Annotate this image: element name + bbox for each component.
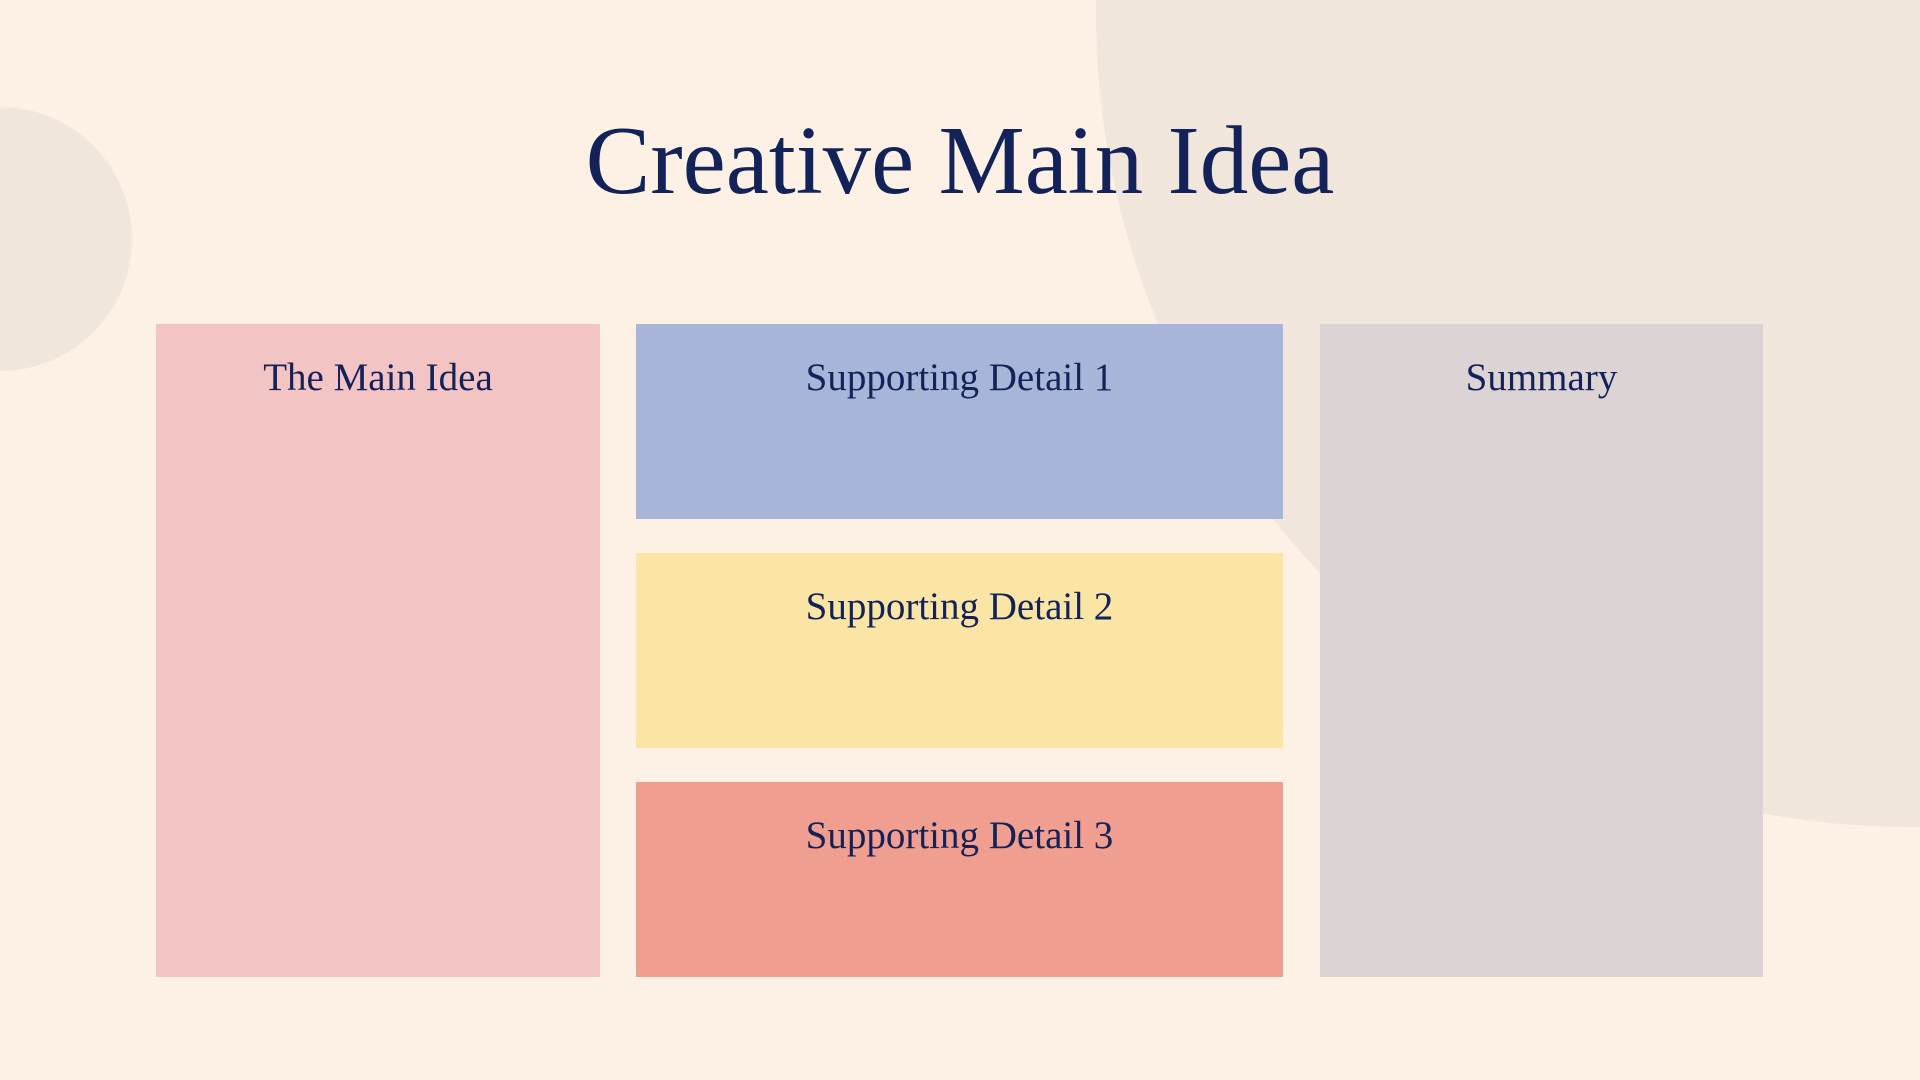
heading: main idea: The Main Idea [263,356,493,399]
heading: summary: Summary [1466,356,1617,399]
heading: detail 3: Supporting Detail 3 [806,814,1113,857]
panel: supporting detail 2 [636,553,1283,748]
title: Creative Main Idea [586,107,1334,214]
panel: summary [1320,324,1763,977]
panel: supporting detail 3 [636,782,1283,977]
panel: main idea [156,324,600,977]
decorative small circle [0,107,132,371]
panel: supporting detail 1 [636,324,1283,519]
heading: detail 2: Supporting Detail 2 [806,585,1113,628]
decorative big circle [1096,0,1920,827]
heading: detail 1: Supporting Detail 1 [806,356,1113,399]
